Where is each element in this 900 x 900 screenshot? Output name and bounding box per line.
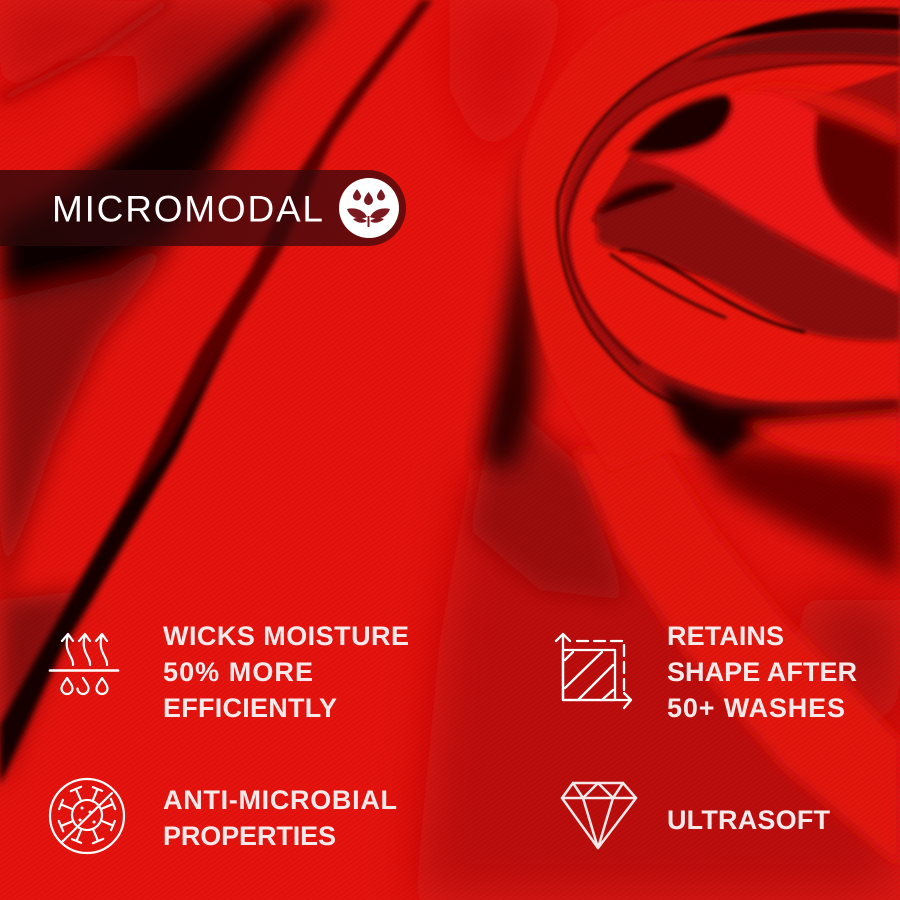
badge bar <box>0 170 406 246</box>
label: retains shape: RETAINS <box>667 621 784 651</box>
icon: plant with water drops <box>339 178 399 238</box>
feature: anti-microbial <box>50 779 397 853</box>
icon: shape retention <box>556 634 631 708</box>
feature: wicks moisture <box>50 621 409 723</box>
label: wicks moisture: 50% MORE <box>163 657 313 687</box>
creases <box>0 0 433 785</box>
icon: crossed-out virus <box>50 779 124 853</box>
icon: moisture wicking <box>50 634 118 694</box>
label: ultrasoft: ULTRASOFT <box>667 805 830 835</box>
badge: micromodal <box>0 170 406 246</box>
badge title: MICROMODAL <box>52 188 323 230</box>
swirl <box>482 150 540 470</box>
feature: retains shape <box>556 621 857 723</box>
label: anti-microbial: ANTI-MICROBIAL <box>163 785 397 815</box>
label: retains shape: 50+ WASHES <box>667 693 845 723</box>
label: retains shape: SHAPE AFTER <box>667 657 857 687</box>
label: wicks moisture: EFFICIENTLY <box>163 693 337 723</box>
icon: diamond <box>562 783 636 848</box>
label: wicks moisture: WICKS MOISTURE <box>163 621 409 651</box>
label: anti-microbial: PROPERTIES <box>163 821 336 851</box>
feature: ultrasoft <box>562 783 830 848</box>
left folds <box>0 0 625 790</box>
shadow under swirl <box>690 440 900 580</box>
